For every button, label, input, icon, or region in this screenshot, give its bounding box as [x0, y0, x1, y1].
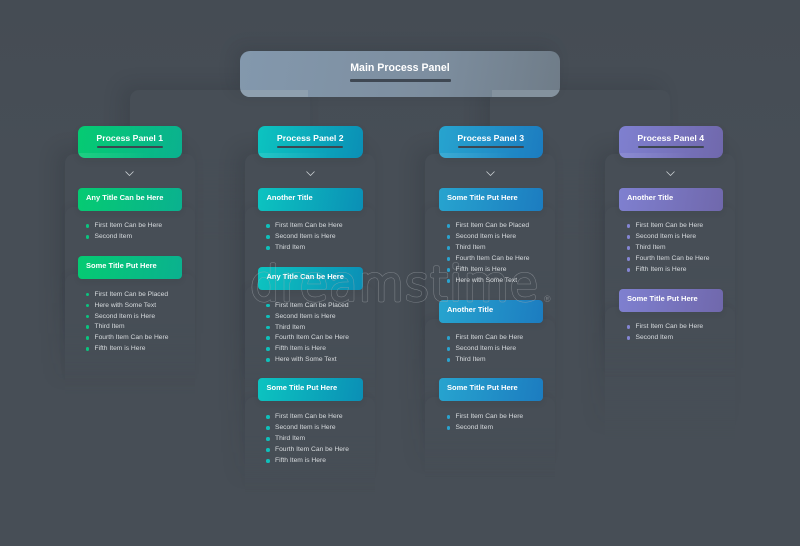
list: Third Item	[636, 244, 666, 251]
list: First Item Can be Here	[636, 323, 703, 330]
connector panel left	[100, 60, 340, 240]
title bar: Another Title	[266, 193, 313, 202]
column 1 backing panels	[62, 203, 65, 326]
heading: process panel 4: Process Panel 4	[637, 133, 704, 143]
heading: process panel 2	[258, 126, 362, 158]
title bar: Some Title Put Here	[627, 294, 698, 302]
list: Third Item	[275, 435, 305, 442]
list: Second Item	[456, 424, 493, 431]
title bar	[438, 378, 543, 401]
list: First Item Can be Placed	[275, 302, 349, 308]
connector panel right	[460, 60, 700, 240]
list: Fourth Item Can be Here	[94, 334, 168, 341]
list: Fourth Item Can be Here	[456, 255, 529, 262]
column 4 backing panels	[602, 203, 605, 331]
list: Third Item	[275, 324, 305, 330]
list: First Item Can be Placed	[94, 290, 168, 298]
list: First Item Can be Here	[636, 222, 703, 229]
main process panel: Main Process Panel	[350, 62, 450, 74]
title bar: Some Title Put Here	[447, 193, 518, 202]
list: Fifth Item is Here	[94, 345, 145, 352]
list: Fifth Item is Here	[275, 457, 326, 464]
main process panel	[240, 51, 560, 97]
list: Second Item is Here	[275, 312, 336, 320]
column 3 backing panels	[420, 203, 425, 348]
icon: chevron 3	[486, 171, 495, 176]
icon: chevron 4	[666, 171, 675, 176]
column 2 backing panels	[240, 203, 245, 368]
watermark	[252, 262, 551, 304]
list: Second Item is Here	[456, 233, 516, 240]
icon: chevron 2	[306, 171, 315, 176]
icon: chevron 1	[125, 171, 134, 176]
list: Fifth Item is Here	[456, 266, 506, 273]
title bar	[78, 188, 182, 211]
heading: process panel 1	[78, 126, 182, 158]
title bar: Any Title Can be Here	[86, 193, 163, 202]
list: First Item Can be Here	[94, 222, 162, 229]
list	[266, 302, 349, 363]
list: First Item Can be Here	[456, 334, 523, 341]
list	[86, 222, 162, 240]
title bar	[258, 267, 362, 290]
list: Fifth Item is Here	[636, 266, 686, 273]
list	[447, 222, 530, 284]
list: Third Item	[456, 244, 486, 251]
list: First Item Can be Here	[456, 413, 523, 420]
list: Here with Some Text	[94, 302, 156, 308]
list: Second Item is Here	[94, 312, 155, 320]
title bar: Another Title	[627, 193, 673, 202]
list: Here with Some Text	[275, 356, 337, 363]
list: Fifth Item is Here	[275, 345, 326, 352]
list: Fourth Item Can be Here	[636, 255, 709, 262]
title bar: Any Title Can be Here	[266, 272, 344, 281]
list	[447, 413, 523, 431]
list	[627, 323, 703, 341]
list: Second Item is Here	[275, 424, 336, 431]
title bar	[78, 256, 182, 279]
list: First Item Can be Here	[275, 413, 343, 420]
list: Third Item	[456, 356, 486, 363]
heading: process panel 3	[438, 126, 543, 158]
list: Second Item is Here	[636, 233, 696, 240]
list: Fourth Item Can be Here	[275, 334, 349, 341]
list: First Item Can be Placed	[456, 222, 529, 229]
title bar	[438, 188, 543, 211]
title bar: Some Title Put Here	[447, 383, 518, 392]
list: Second Item is Here	[275, 233, 336, 240]
list: Third Item	[275, 244, 305, 251]
heading: process panel 4	[618, 126, 723, 158]
title bar	[438, 300, 543, 323]
title bar: Some Title Put Here	[86, 261, 157, 270]
heading: process panel 1: Process Panel 1	[96, 133, 163, 143]
list	[627, 222, 710, 273]
list: Here with Some Text	[456, 277, 517, 284]
title bar: Another Title	[447, 305, 493, 314]
title bar	[618, 288, 723, 312]
list: Second Item	[94, 233, 132, 240]
list: Second Item	[636, 334, 673, 341]
list: Second Item is Here	[456, 345, 516, 352]
list	[86, 290, 168, 352]
title bar	[258, 378, 362, 401]
title bar: Some Title Put Here	[266, 383, 337, 392]
title bar	[618, 188, 723, 211]
heading: process panel 3: Process Panel 3	[457, 133, 524, 143]
list: Third Item	[94, 323, 125, 330]
list	[266, 222, 343, 251]
heading: process panel 2: Process Panel 2	[277, 133, 344, 143]
watermark: ®	[544, 294, 551, 304]
title bar	[258, 188, 362, 211]
list: First Item Can be Here	[275, 222, 343, 229]
list	[447, 334, 523, 363]
list	[266, 413, 349, 464]
list: Fourth Item Can be Here	[275, 446, 349, 453]
